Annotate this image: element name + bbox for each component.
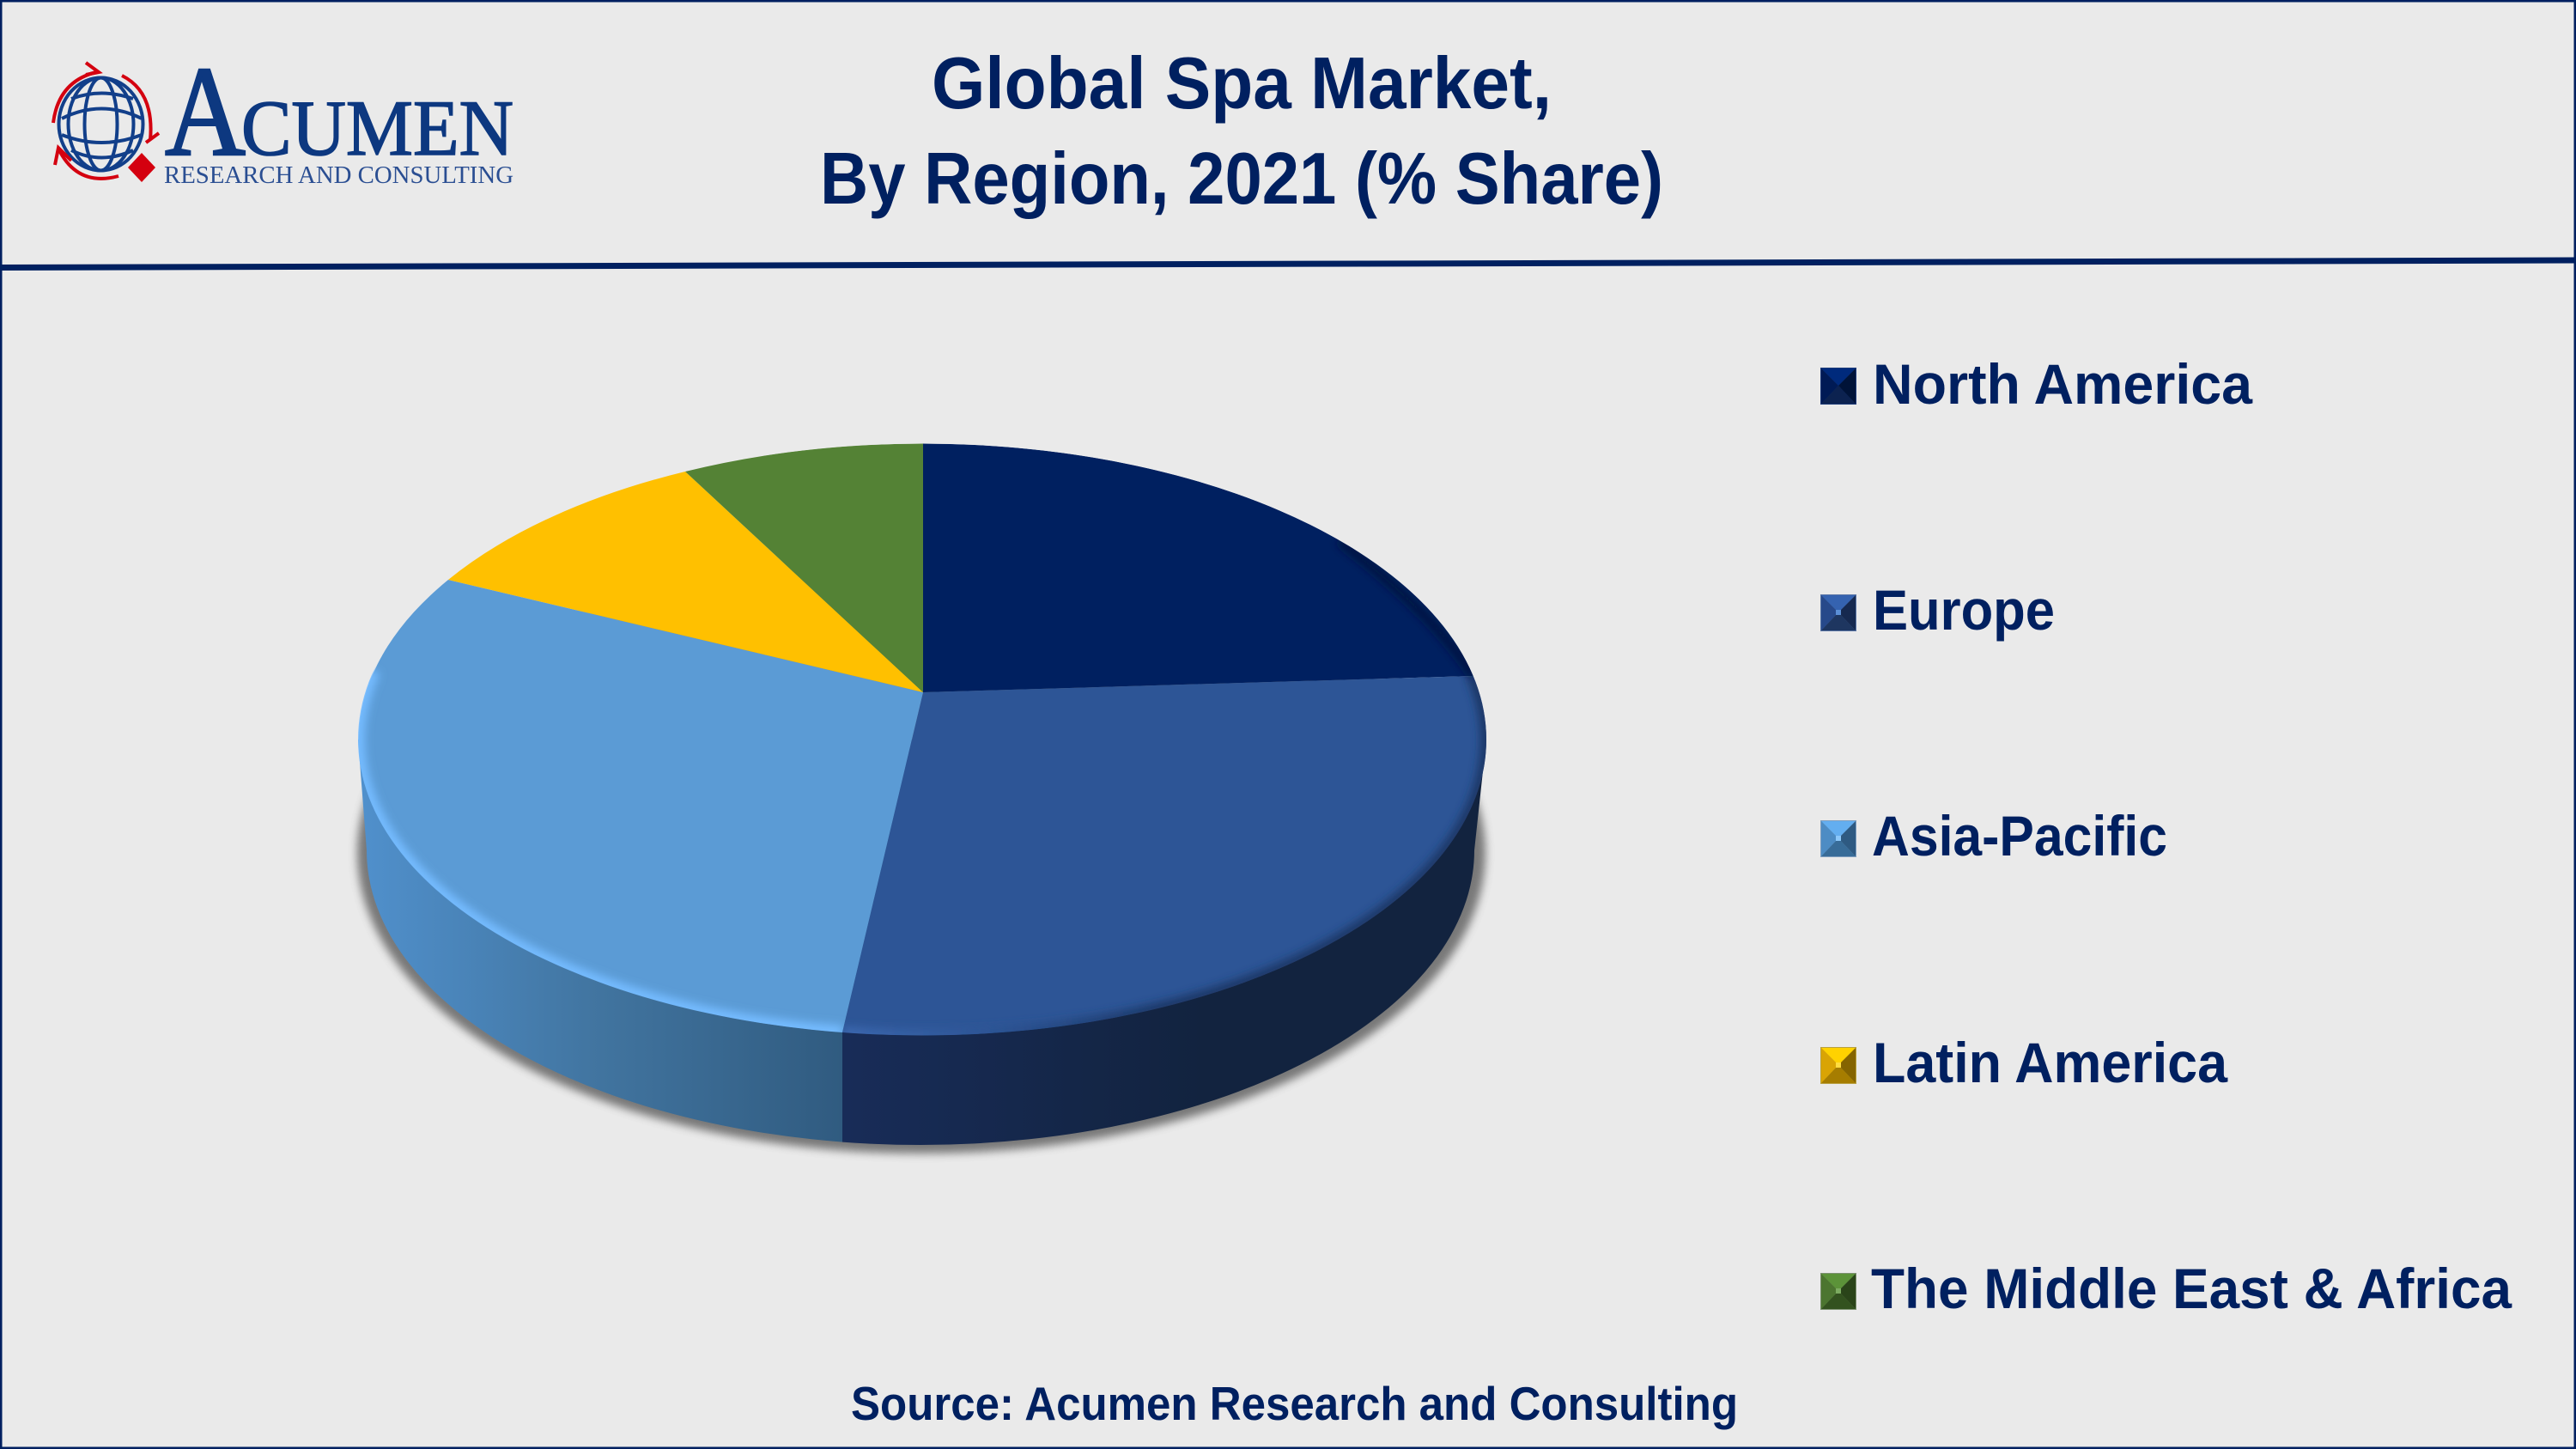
header divider xyxy=(0,260,2576,268)
legend item: Latin America: Latin America xyxy=(1873,1031,2228,1094)
logo wordmark xyxy=(164,40,513,189)
side wall: Europe xyxy=(842,740,1483,1145)
slice: The Middle East and Africa xyxy=(685,443,923,692)
legend item: The Middle East and Africa: The Middle East & Africa xyxy=(1871,1257,2512,1320)
source note: Source: Acumen Research and Consulting xyxy=(851,1377,1738,1430)
slice: Asia-Pacific xyxy=(359,580,923,1032)
legend xyxy=(1820,352,2512,1320)
title: Global Spa Market, xyxy=(932,43,1552,125)
logo: Acumen Research and Consulting xyxy=(53,40,513,189)
icon: red diamond xyxy=(128,153,155,182)
bevel highlight: Asia-Pacific xyxy=(358,671,842,1032)
3D pie chart xyxy=(357,443,1487,1154)
icon: globe xyxy=(58,77,143,170)
icon: red circular arrows xyxy=(53,63,159,179)
side wall: Asia-Pacific xyxy=(358,740,842,1142)
logo wordmark: A xyxy=(165,40,246,183)
pie shadow xyxy=(357,552,1485,1154)
legend item: Asia-Pacific: Asia-Pacific xyxy=(1872,804,2167,868)
slice: Latin America xyxy=(448,472,923,692)
legend item: Europe: Europe xyxy=(1873,578,2055,642)
bevel shade: Europe edge xyxy=(842,676,1487,1037)
logo wordmark: CUMEN xyxy=(241,84,513,172)
bevel shade: North America edge xyxy=(1340,541,1473,676)
legend item: North America: North America xyxy=(1873,352,2253,416)
slice: Europe xyxy=(842,676,1486,1035)
slice: North America xyxy=(923,443,1473,692)
logo wordmark: RESEARCH AND CONSULTING xyxy=(164,161,513,189)
title: By Region, 2021 (% Share) xyxy=(820,138,1663,220)
slices xyxy=(358,443,1487,1037)
title xyxy=(820,43,1663,220)
